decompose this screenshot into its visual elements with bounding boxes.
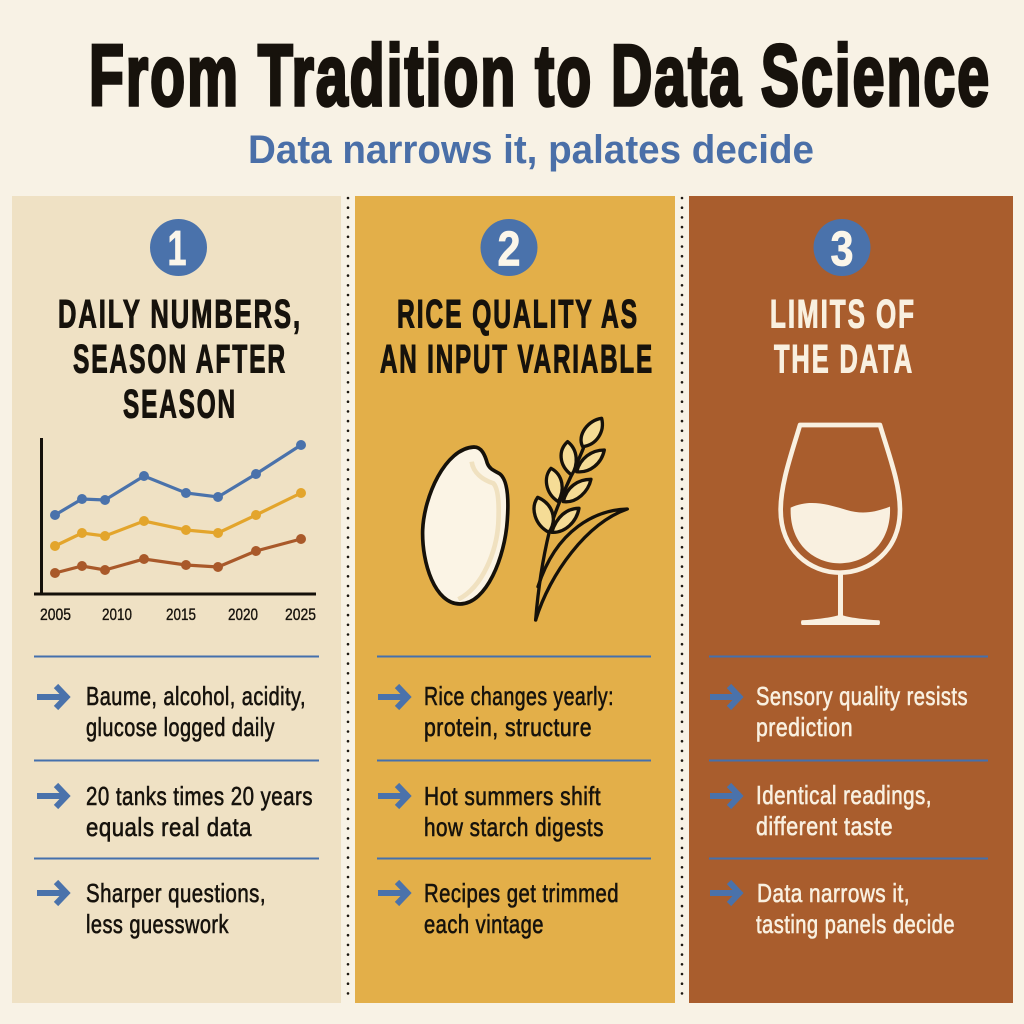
bullet 2: different taste bbox=[756, 811, 893, 841]
icon: rice grain bbox=[423, 447, 508, 604]
number badge 2: 2 bbox=[498, 222, 520, 276]
yellow series bbox=[50, 488, 306, 551]
heading bbox=[770, 292, 916, 382]
heading: AN INPUT VARIABLE bbox=[380, 338, 654, 382]
bullet 2: 20 tanks times 20 years bbox=[86, 781, 313, 811]
number badge 3 bbox=[814, 219, 870, 276]
heading bbox=[380, 292, 654, 382]
blue series bbox=[50, 440, 306, 520]
number badge 2 bbox=[480, 219, 538, 276]
panel background bbox=[689, 196, 1013, 1003]
year labels bbox=[40, 606, 316, 624]
bullet 2 bbox=[378, 781, 604, 842]
heading: DAILY NUMBERS, bbox=[58, 292, 302, 336]
heading: SEASON AFTER bbox=[73, 338, 287, 382]
bullet 1: Rice changes yearly: bbox=[424, 681, 614, 711]
bullet 1: Baume, alcohol, acidity, bbox=[86, 681, 306, 711]
panel: rice quality bbox=[355, 196, 675, 1003]
year labels: 2025 bbox=[285, 606, 316, 624]
year labels: 2005 bbox=[40, 606, 71, 624]
bullet 3: Data narrows it, bbox=[757, 878, 910, 908]
panel: limits of the data bbox=[689, 196, 1013, 1003]
bullet 3: tasting panels decide bbox=[756, 909, 955, 939]
bullet 2: equals real data bbox=[86, 812, 252, 842]
line chart bbox=[34, 438, 316, 624]
year labels: 2010 bbox=[102, 606, 132, 624]
bullet 3: Sharper questions, bbox=[86, 878, 266, 908]
panel background bbox=[12, 196, 341, 1003]
bullet 1: Sensory quality resists bbox=[756, 681, 968, 711]
year labels: 2020 bbox=[228, 606, 258, 624]
panel: daily numbers bbox=[12, 196, 341, 1003]
heading bbox=[58, 292, 302, 426]
number badge 3: 3 bbox=[830, 222, 854, 276]
bullet 1 bbox=[378, 681, 614, 742]
bullet 1 bbox=[710, 681, 968, 742]
axes bbox=[34, 438, 316, 595]
bullet 3 bbox=[710, 878, 955, 939]
bullet 1: protein, structure bbox=[424, 712, 592, 742]
bullet 2 bbox=[710, 780, 932, 841]
heading: THE DATA bbox=[774, 338, 914, 382]
bullet 2: how starch digests bbox=[424, 812, 604, 842]
heading: LIMITS OF bbox=[770, 292, 916, 336]
icon: wine glass bbox=[781, 425, 900, 625]
number badge 1 bbox=[150, 219, 207, 276]
bullet 1: glucose logged daily bbox=[86, 712, 275, 742]
panel background bbox=[355, 196, 675, 1003]
bullet 2 bbox=[37, 781, 313, 842]
number badge 1: 1 bbox=[168, 222, 186, 276]
bullet 3 bbox=[378, 878, 619, 939]
heading: SEASON bbox=[123, 382, 237, 426]
bullet 3: each vintage bbox=[424, 909, 544, 939]
bullet 2: Hot summers shift bbox=[424, 781, 601, 811]
subtitle: Data narrows it, palates decide bbox=[248, 128, 814, 172]
year labels: 2015 bbox=[166, 606, 196, 624]
bullet 1 bbox=[37, 681, 306, 742]
bullet 1: prediction bbox=[756, 712, 853, 742]
icon: rice stalk bbox=[534, 418, 627, 620]
brown series bbox=[50, 534, 306, 578]
bullet 3: Recipes get trimmed bbox=[424, 878, 619, 908]
bullet 3: less guesswork bbox=[86, 909, 229, 939]
bullet 2: Identical readings, bbox=[756, 780, 932, 810]
bullet 3 bbox=[37, 878, 266, 939]
heading: RICE QUALITY AS bbox=[397, 292, 639, 336]
